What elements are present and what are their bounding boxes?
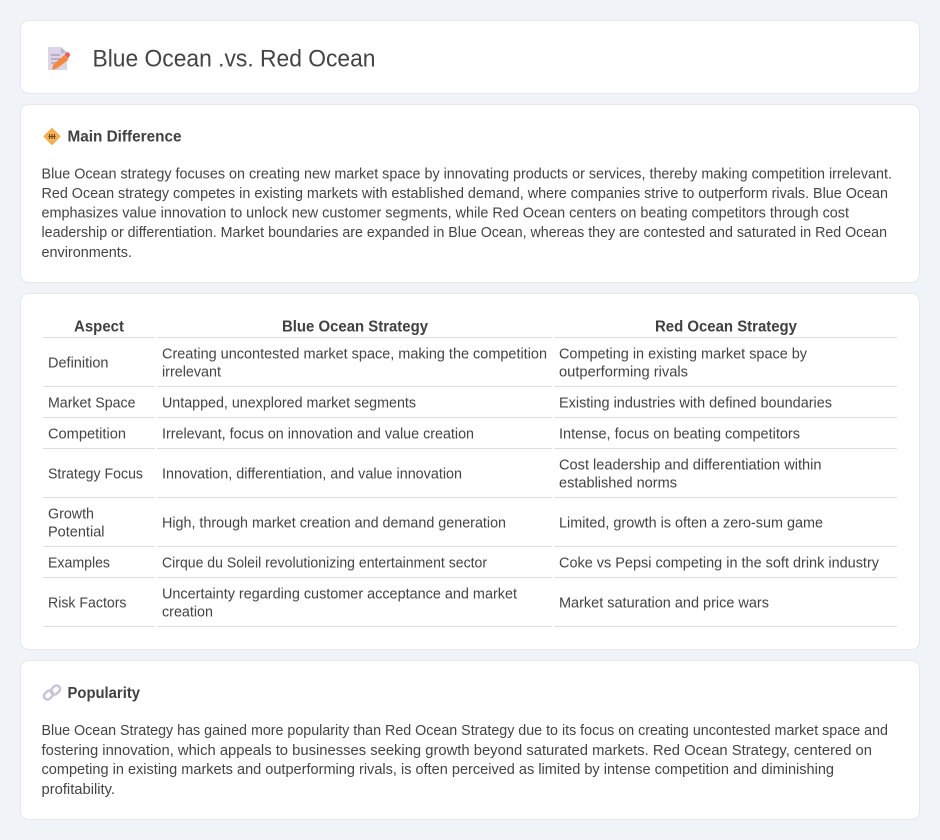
icon: chain link xyxy=(42,684,62,701)
table row: competition: Irrelevant, focus on innovation and value creation xyxy=(162,426,474,442)
table row: strategy focus: Strategy Focus xyxy=(48,466,143,482)
text block: main difference paragraph: emphasizes value innovation to unlock new customer segments, while Red Ocean centers on beating competitors through cost xyxy=(42,206,849,222)
heading: popularity: Popularity xyxy=(68,685,140,702)
table row: definition: Competing in existing market space by xyxy=(559,346,808,362)
table row: definition: outperforming rivals xyxy=(559,364,688,380)
table header row: Red Ocean Strategy xyxy=(655,318,797,336)
text block: main difference paragraph: Blue Ocean strategy focuses on creating new market space by innovating products or services, thereby making competition irrelevant. xyxy=(42,166,892,182)
table row: risk factors: Uncertainty regarding customer acceptance and market xyxy=(162,586,517,602)
table header row: Blue Ocean Strategy xyxy=(282,318,428,336)
table row: growth potential: Growth xyxy=(48,506,94,522)
table row: market space: Market Space xyxy=(48,396,136,412)
table row: competition: Intense, focus on beating competitors xyxy=(559,426,800,442)
table row: definition: Definition xyxy=(48,356,108,372)
table row: examples: Cirque du Soleil revolutionizing entertainment sector xyxy=(162,556,487,572)
table row: definition xyxy=(48,346,808,380)
icon: orange diamond sign xyxy=(44,128,60,144)
text block: main difference paragraph: environments. xyxy=(42,245,132,261)
table header row: Aspect xyxy=(74,318,125,336)
table row: risk factors: creation xyxy=(162,604,213,620)
table header row xyxy=(74,318,797,336)
table row: strategy focus: Innovation, differentiation, and value innovation xyxy=(162,466,462,482)
heading: title text: Blue Ocean .vs. Red Ocean xyxy=(92,46,376,72)
table row: examples: Examples xyxy=(48,556,110,572)
table row: definition: Creating uncontested market space, making the competition xyxy=(162,346,547,362)
table row: market space: Existing industries with defined boundaries xyxy=(559,396,832,412)
text block: main difference paragraph: Red Ocean strategy competes in existing markets with established demand, where companies strive to outperform rivals. Blue Ocean xyxy=(42,186,888,202)
table row: growth potential: Limited, growth is often a zero-sum game xyxy=(559,516,823,532)
table row: competition: Competition xyxy=(48,426,126,442)
table row: growth potential: High, through market creation and demand generation xyxy=(162,516,506,532)
panel: popularity xyxy=(20,660,920,820)
text block: popularity paragraph: Blue Ocean Strategy has gained more popularity than Red Ocean Strategy due to its focus on creating uncontested market space and xyxy=(42,723,888,739)
text block: main difference paragraph: leadership or differentiation. Market boundaries are expanded in Blue Ocean, whereas they are contested and saturated in Red Ocean xyxy=(42,225,887,241)
icon: document with pencil xyxy=(48,47,70,70)
table row: risk factors: Risk Factors xyxy=(48,596,126,612)
table row: growth potential: Potential xyxy=(48,524,104,540)
table row: competition xyxy=(48,426,800,442)
table row: risk factors: Market saturation and price wars xyxy=(559,596,769,612)
table row: definition: irrelevant xyxy=(162,364,221,380)
table row: strategy focus: established norms xyxy=(559,476,677,492)
text block: popularity paragraph: competing in existing markets and outperforming rivals, is often perceived as limited by intense competition and diminishing xyxy=(42,762,834,778)
text block: main difference paragraph xyxy=(42,166,892,261)
table row: strategy focus: Cost leadership and differentiation within xyxy=(559,458,822,474)
table row: market space: Untapped, unexplored market segments xyxy=(162,396,416,412)
table row: market space xyxy=(48,396,832,412)
panel: comparison table xyxy=(20,294,920,650)
table row: strategy focus xyxy=(48,458,822,492)
heading: main difference: Main Difference xyxy=(68,128,182,146)
table row: examples: Coke vs Pepsi competing in the soft drink industry xyxy=(559,556,880,572)
table row: growth potential xyxy=(48,506,823,540)
text block: popularity paragraph xyxy=(42,723,888,798)
panel: main difference xyxy=(20,104,920,282)
panel: title xyxy=(20,20,920,94)
table row: risk factors xyxy=(48,586,769,620)
text block: popularity paragraph: fostering innovation, which appeals to businesses seeking growth beyond saturated markets. Red Ocean Strategy, centered on xyxy=(42,743,872,759)
text block: popularity paragraph: profitability. xyxy=(42,782,115,798)
table row: examples xyxy=(48,556,880,572)
